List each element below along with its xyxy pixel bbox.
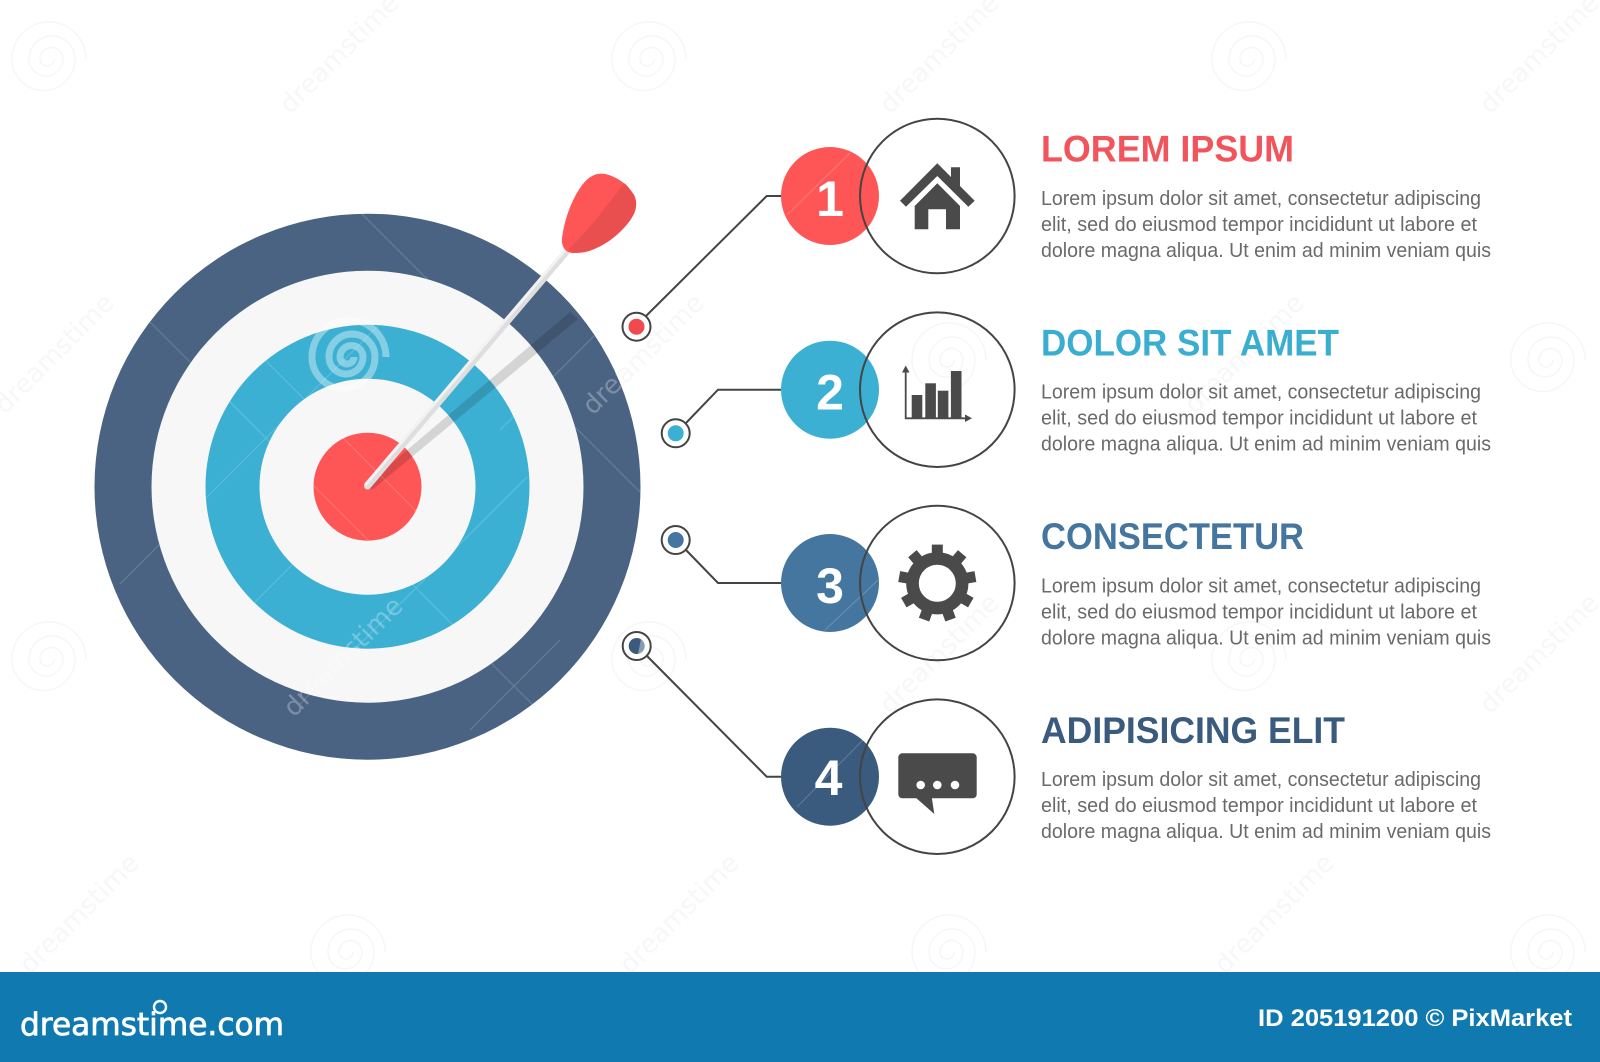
body 2: elit, sed do eiusmod tempor incididunt ut labore et [1041, 408, 1477, 430]
text block 2 [1041, 322, 1491, 456]
connector 2 [662, 390, 785, 447]
heading 4: ADIPISICING ELIT [1041, 710, 1345, 751]
number 4: 4 [815, 750, 843, 806]
body 4: Lorem ipsum dolor sit amet, consectetur adipiscing [1041, 769, 1481, 791]
connector 1 [622, 196, 785, 341]
heading 1: LOREM IPSUM [1041, 129, 1294, 170]
body 4: elit, sed do eiusmod tempor incididunt ut labore et [1041, 795, 1477, 817]
connector 3 [662, 526, 785, 583]
step 3 outline [860, 506, 1015, 660]
icon: speech bubble [898, 753, 977, 814]
board watermark: dreamstime [278, 591, 409, 723]
body 4: dolore magna aliqua. Ut enim ad minim veniam quis [1041, 821, 1491, 843]
heading 3: CONSECTETUR [1041, 516, 1304, 557]
board watermark [120, 214, 640, 730]
step 1 badge [781, 147, 879, 245]
inner white ring [260, 379, 476, 595]
footer credit: ID 205191200 © PixMarket [1258, 1005, 1572, 1032]
dart shaft [366, 250, 567, 486]
text block 1 [1041, 129, 1491, 262]
text block 3 [1041, 516, 1491, 649]
icon: gear [898, 545, 976, 622]
dart flight [562, 174, 636, 253]
icon: bar chart [902, 366, 972, 422]
step 2 badge [781, 341, 879, 439]
watermark pattern: dreamstime [614, 848, 745, 980]
body 1: Lorem ipsum dolor sit amet, consectetur adipiscing [1041, 188, 1481, 210]
number 2: 2 [816, 364, 844, 420]
watermark pattern: dreamstime [1179, 288, 1310, 420]
body 3: Lorem ipsum dolor sit amet, consectetur adipiscing [1041, 575, 1481, 597]
bullseye [314, 433, 422, 541]
number 3: 3 [816, 558, 844, 614]
white ring [152, 271, 584, 703]
body 2: Lorem ipsum dolor sit amet, consectetur adipiscing [1041, 382, 1481, 404]
body 2 [1041, 382, 1491, 456]
step 4 badge [781, 728, 879, 826]
connector 4 [623, 632, 785, 777]
watermark pattern: dreamstime [874, 588, 1005, 720]
target board [94, 214, 640, 760]
outer ring [94, 214, 640, 760]
watermark pattern: dreamstime [14, 848, 145, 980]
body 3: elit, sed do eiusmod tempor incididunt ut labore et [1041, 601, 1477, 623]
step 4 outline [860, 699, 1015, 854]
body 3 [1041, 575, 1491, 649]
body 1 [1041, 188, 1491, 262]
number 1: 1 [816, 171, 844, 227]
step 2 outline [860, 312, 1015, 467]
footer logo: dreamstime.com [20, 1007, 284, 1043]
body 4 [1041, 769, 1491, 843]
dart shadow [367, 312, 578, 490]
icon: house [900, 163, 975, 229]
heading 2: DOLOR SIT AMET [1041, 322, 1339, 363]
board watermark: dreamstime [577, 289, 708, 421]
step 3 badge [781, 534, 879, 632]
footer bar [0, 972, 1600, 1062]
body 3: dolore magna aliqua. Ut enim ad minim veniam quis [1041, 627, 1491, 649]
body 1: dolore magna aliqua. Ut enim ad minim veniam quis [1041, 240, 1491, 262]
step 1 outline [860, 119, 1015, 273]
body 1: elit, sed do eiusmod tempor incididunt ut labore et [1041, 214, 1477, 236]
body 2: dolore magna aliqua. Ut enim ad minim veniam quis [1041, 434, 1491, 456]
blue ring [206, 325, 530, 649]
dart [366, 174, 636, 490]
watermark pattern: dreamstime [1209, 848, 1340, 980]
watermark pattern: dreamstime [579, 288, 710, 420]
text block 4 [1041, 710, 1491, 843]
